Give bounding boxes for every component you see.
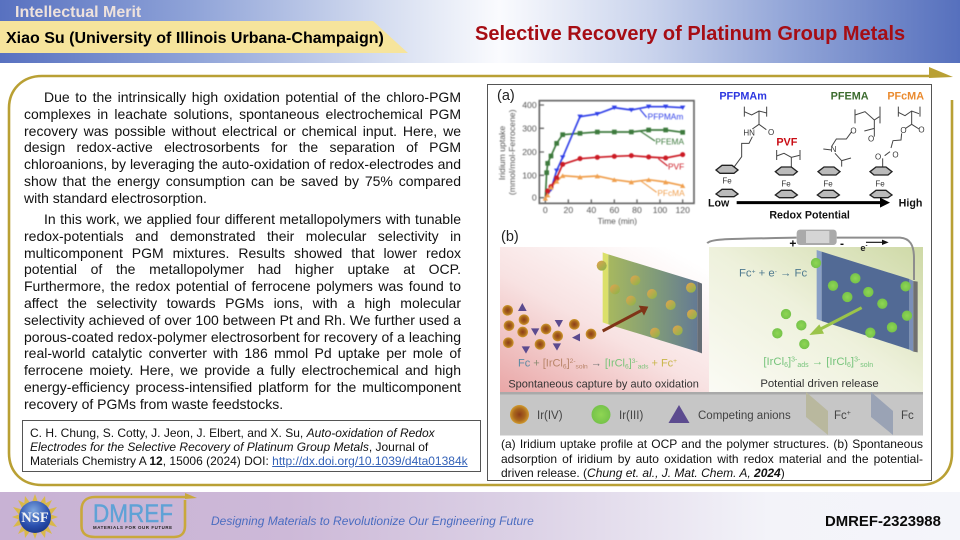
release equation: 6: [847, 362, 851, 369]
section label: Intellectual Merit: [15, 4, 141, 21]
capture caption: Spontaneous capture by auto oxidation: [508, 379, 699, 391]
release reduction equation: Fc: [739, 268, 752, 280]
capture panel background: [500, 247, 709, 393]
figure caption: driven release. (Chung et. al., J. Mat. Chem. A, 2024): [501, 466, 785, 480]
capture equation: →: [588, 357, 605, 369]
circuit and power source: [707, 230, 914, 280]
uptake line chart: PFEMA: [655, 136, 684, 146]
release equation: soln: [860, 362, 873, 369]
polymer structures: PFcMA: [887, 91, 924, 103]
DMREF logo: MATERIALS FOR OUR FUTURE: [93, 525, 172, 530]
polymer structures: PFPMAm: [719, 91, 767, 103]
body text: redox-potentials and demonstrated their molecular selectivity in: [24, 228, 461, 244]
circuit and power source: -: [840, 237, 844, 251]
capture equation: 3-: [632, 358, 638, 365]
body text: show that the energy consumption can be saved by 75% compared: [24, 173, 461, 189]
uptake line chart: 60: [610, 205, 619, 215]
body text: multicomponent PGM mixtures. Results showed that lower redox: [24, 245, 461, 261]
uptake line chart: Iridium uptake: [497, 126, 507, 180]
award number: DMREF-2323988: [825, 514, 941, 530]
legend: Fc+: +: [847, 410, 851, 417]
uptake line chart: 0: [543, 205, 548, 215]
uptake line chart: 400: [522, 100, 537, 110]
polymer structures: Fe: [823, 179, 833, 188]
polymer structures: [708, 91, 925, 222]
release reduction equation: +: [752, 268, 756, 275]
uptake line chart: [497, 100, 694, 226]
capture equation: Fc + [IrCl: [518, 357, 563, 369]
body text: design redox-active electrosorbents for the separation of PGM: [24, 139, 461, 155]
uptake line chart: 100: [653, 205, 667, 215]
uptake line chart: 120: [675, 205, 690, 215]
DMREF logo: DMREF: [93, 500, 173, 528]
polymer structures: O: [918, 125, 925, 134]
polymer structures: Fe: [781, 179, 791, 188]
polymer structures: O: [868, 134, 874, 143]
release panel background: [709, 247, 923, 393]
footer band: [0, 492, 960, 540]
polymer structures: PVF: [776, 137, 798, 149]
legend: Fc: [871, 392, 914, 435]
citation box: Materials Chemistry A 12, 15006 (2024) DOI: http://dx.doi.org/10.1039/d4ta01384k: [30, 454, 468, 468]
body text: with standard electrosorption.: [24, 190, 207, 206]
release equation: ]: [788, 356, 791, 368]
capture equation: +: [673, 358, 677, 365]
figure caption: adsorption of iridium by auto oxidation with redox material and the potential-: [501, 452, 923, 466]
polymer structures: Fe: [875, 179, 885, 188]
body text: Due to the intrinsically high oxidation potential of the chloro-PGM: [44, 89, 461, 105]
figure caption: [501, 437, 923, 480]
release reduction equation: -: [775, 268, 777, 275]
legend: Ir(IV): Ir(IV): [537, 410, 563, 422]
ferrocene units: [716, 165, 892, 198]
redox potential arrow: [737, 198, 882, 207]
figure panel: [487, 84, 932, 481]
uptake line chart: 40: [587, 205, 596, 215]
polymer structures: O: [892, 151, 899, 160]
release equation: 3-: [791, 357, 798, 364]
body text: selectivity achieved of over 100 between Pt and Rh. We further used a: [24, 312, 461, 328]
NSF logo: NSF: [21, 510, 49, 526]
capture equation: [IrCl: [605, 357, 625, 369]
body text: complexes in leachate solutions, spontaneous electrochemical PGM: [24, 106, 461, 122]
polymer structures: O: [900, 126, 907, 135]
body text: energy-efficiency process-intensified platform for the multicomponent: [24, 379, 461, 395]
title: Selective Recovery of Platinum Group Metals: [475, 23, 905, 45]
circuit and power source: e: [860, 243, 866, 253]
body text: chloroanions, by leveraging the auto-oxidation of redox-electrodes and: [24, 156, 461, 172]
circuit and power source: +: [789, 237, 796, 251]
release diagram: [707, 230, 918, 390]
author name: Xiao Su (University of Illinois Urbana-Champaign): [6, 30, 384, 47]
release caption: Potential driven release: [760, 378, 879, 390]
release reduction equation: + e: [755, 268, 775, 280]
body text: affect the selectivity towards PGMs ions, with a high molecular: [24, 295, 461, 311]
label (b): (b): [501, 229, 519, 245]
release reduction equation: → Fc: [777, 268, 807, 280]
release equation: 6: [784, 362, 788, 369]
citation box: [22, 420, 481, 472]
polymer structures: PFEMA: [831, 91, 869, 103]
legend: Ir(III): Ir(III): [619, 410, 643, 422]
body text: In this work, we applied four different metallopolymers with tunable: [44, 211, 461, 227]
legend: Ir(III): [592, 405, 643, 424]
polymer structures: O: [768, 128, 774, 137]
polymer structures: Redox Potential: [769, 210, 850, 222]
figure caption: (a) Iridium uptake profile at OCP and the polymer structures. (b) Spontaneous: [501, 437, 923, 451]
legend: competing anions: Competing anions: [698, 410, 791, 422]
release equation: → [IrCl: [809, 356, 847, 368]
legend bar: [500, 392, 923, 436]
release equation: ads: [797, 362, 809, 369]
capture equation: 2-: [570, 358, 576, 365]
uptake line chart: 300: [522, 123, 537, 133]
release equation: ]: [851, 356, 854, 368]
release equation: 3-: [854, 357, 861, 364]
polymer structures: HN: [743, 129, 755, 138]
label (a): (a): [497, 88, 515, 104]
polymer structures: O: [850, 127, 857, 136]
legend: Fc+: [806, 392, 851, 435]
header band: [0, 0, 960, 63]
uptake line chart: 80: [632, 205, 642, 215]
legend: Fc: Fc: [901, 410, 914, 422]
body text: recovery was possible without electrical or chemical input. Here, we: [24, 123, 461, 139]
author banner: [0, 21, 408, 53]
body text: recovery of PGMs from waste feedstocks.: [24, 396, 283, 412]
capture equation: + Fc: [648, 357, 674, 369]
uptake line chart: 200: [522, 147, 537, 157]
polymer structures: N: [831, 145, 837, 154]
polymer structures: Fe: [722, 177, 732, 186]
NSF logo: [12, 494, 58, 539]
uptake line chart: Time (min): [598, 216, 637, 226]
body text: [24, 89, 461, 412]
capture equation: 6: [563, 363, 567, 370]
uptake line chart: 100: [522, 170, 537, 180]
capture equation: 6: [625, 363, 629, 370]
legend: Ir(IV): [510, 405, 563, 424]
uptake line chart: 20: [564, 205, 573, 215]
circuit and power source: -: [866, 244, 868, 250]
uptake line chart: PFPMAm: [648, 111, 683, 121]
release equation: [IrCl: [763, 356, 784, 368]
body text: ferrocene moiety. Here, we provide a fully electrochemical and high: [24, 362, 461, 378]
polymer structures: Low: [708, 198, 730, 210]
uptake line chart: PVF: [668, 161, 684, 171]
legend: Fc+: Fc: [834, 410, 847, 422]
citation box: C. H. Chung, S. Cotty, J. Jeon, J. Elbert, and X. Su, Auto-oxidation of Redox: [30, 426, 435, 440]
body text: real-world catalytic converter with 186 mmol Pd uptake per mole of: [24, 345, 461, 361]
capture equation: soln: [576, 363, 588, 370]
capture equation: ]: [629, 357, 632, 369]
body text: porous-coated redox-polymer electrosorbent for recovery of a leaching: [24, 329, 461, 345]
polymer structures: O: [875, 152, 881, 161]
capture equation: ads: [638, 363, 649, 370]
capture diagram: [502, 252, 702, 391]
body text: potential of the metallopolymer had higher uptake at OCP.: [24, 261, 461, 277]
citation box: Electrodes for the Selective Recovery of Platinum Group Metals, Journal of: [30, 440, 428, 454]
capture equation: ]: [567, 357, 570, 369]
uptake line chart: 0: [532, 193, 537, 203]
polymer structures: High: [899, 198, 922, 210]
DMREF logo: [82, 493, 197, 537]
uptake line chart: PFcMA: [657, 188, 685, 198]
uptake line chart: (mmol/mol-Ferrocene): [507, 109, 517, 195]
legend: competing anions: [668, 405, 791, 423]
body text: Furthermore, the redox potential of ferrocene polymers was found to: [24, 278, 461, 294]
tagline: Designing Materials to Revolutionize Our Engineering Future: [211, 514, 534, 528]
